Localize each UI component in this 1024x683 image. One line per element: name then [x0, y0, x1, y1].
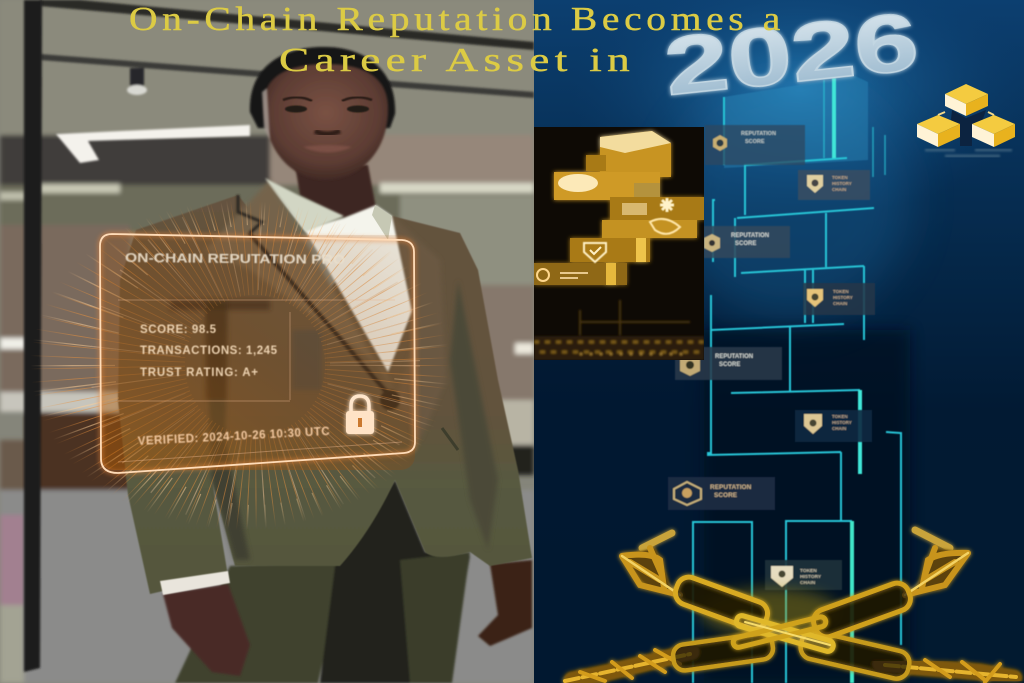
spark rays — [65, 175, 445, 555]
chain: upper right — [810, 530, 968, 640]
label card 2 — [798, 170, 870, 200]
translucent top slab — [724, 76, 868, 168]
label card 5: REPUTATION — [715, 354, 753, 360]
panel heading: ON-CHAIN REPUTATION PRO — [125, 250, 345, 267]
label card 1: REPUTATION — [741, 131, 776, 137]
panel: office photo background — [0, 0, 534, 683]
glass door frame — [24, 0, 42, 672]
title — [129, 1, 785, 79]
icon: gear — [660, 198, 674, 212]
hands — [163, 560, 532, 676]
panel: gold blocks inset — [534, 127, 704, 360]
label card 8: TOKEN — [800, 568, 817, 574]
score stats: TRUST RATING: A+ — [140, 367, 258, 379]
label card 7: REPUTATION — [710, 484, 752, 491]
label card 4: HISTORY — [833, 295, 853, 300]
person — [118, 47, 532, 683]
label card 6: TOKEN — [832, 414, 848, 419]
chain: central crossing links — [732, 614, 834, 653]
label card 2: CHAIN — [832, 187, 846, 192]
jacket pocket and cuff — [442, 428, 458, 450]
chain: upper left — [622, 533, 771, 633]
label card 3 — [704, 226, 790, 258]
circuit lines — [693, 78, 901, 683]
title: On-Chain Reputation Becomes a — [129, 1, 785, 38]
label card 2: TOKEN — [832, 175, 848, 180]
panel glow tint — [100, 235, 415, 470]
label card 7 — [668, 477, 775, 510]
label cards — [668, 125, 875, 590]
year 2026: 2026 — [660, 0, 922, 113]
label card 7: SCORE — [714, 492, 738, 499]
chain: lower left — [565, 632, 774, 681]
label card 6: HISTORY — [832, 420, 852, 425]
label card 5: SCORE — [719, 362, 740, 368]
ceiling light — [56, 125, 250, 163]
score stats: TRANSACTIONS: 1,245 — [140, 345, 278, 357]
neck — [295, 165, 376, 218]
verified timestamp: VERIFIED: 2024-10-26 10:30 UTC — [138, 426, 330, 448]
label card 8: CHAIN — [800, 580, 816, 586]
golden crossed chains — [565, 530, 1016, 682]
icon: padlock — [346, 396, 374, 434]
arm shadows and lapel — [170, 180, 498, 560]
label card 1 — [705, 125, 805, 165]
label card 6 — [795, 410, 872, 442]
label card 5 — [675, 347, 782, 380]
chain glow — [700, 588, 840, 636]
icon: shield — [584, 243, 606, 262]
label card 4: CHAIN — [833, 301, 847, 306]
panel: blockchain tower background — [534, 0, 1024, 683]
score stats — [140, 324, 278, 379]
icon: flame seal — [537, 269, 549, 281]
label card 8: HISTORY — [800, 574, 822, 580]
label card 1: SCORE — [745, 139, 765, 145]
chain: lower right — [798, 629, 1016, 682]
label card 4: TOKEN — [833, 289, 849, 294]
label card 6: CHAIN — [832, 426, 846, 431]
label card 4 — [803, 283, 875, 315]
icon: handshake — [650, 219, 680, 234]
label card 3: REPUTATION — [731, 233, 769, 239]
light strips — [40, 184, 120, 193]
ceiling beams — [40, 0, 534, 98]
label card 8 — [765, 560, 842, 590]
trousers — [175, 480, 470, 683]
score stats: SCORE: 98.5 — [140, 324, 217, 336]
suit jacket — [118, 195, 532, 594]
panel: on-chain reputation profile — [100, 234, 415, 473]
head — [250, 47, 395, 180]
icon: blockchain cubes logo — [917, 84, 1015, 156]
label card 3: SCORE — [735, 241, 756, 247]
city lights — [534, 300, 704, 360]
title: Career Asset in — [279, 42, 635, 79]
shirt — [265, 178, 412, 372]
label card 2: HISTORY — [832, 181, 852, 186]
